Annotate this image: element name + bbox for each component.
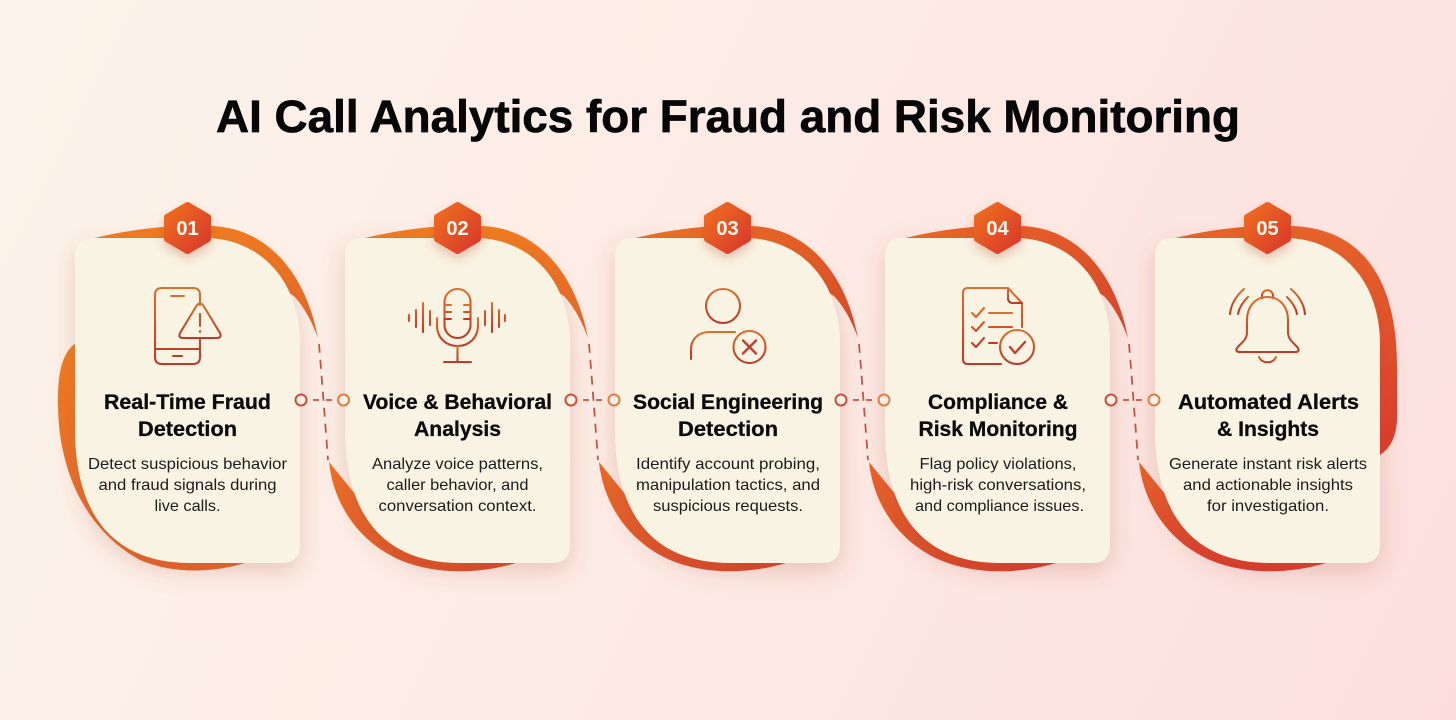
description 5: and actionable insights: [1183, 477, 1353, 494]
heading 5: & Insights: [1217, 417, 1319, 441]
icon: phone with warning: [155, 288, 221, 364]
heading 2: [363, 390, 552, 441]
description 1: [88, 456, 288, 515]
description 4: high-risk conversations,: [910, 477, 1086, 494]
number badge 03: 03: [716, 218, 739, 240]
description 2: Analyze voice patterns,: [372, 456, 543, 473]
description 3: Identify account probing,: [636, 456, 820, 473]
lower ribbon: step 5: [1139, 462, 1326, 571]
description 2: [372, 456, 543, 515]
left ribbon: step 1: [58, 343, 245, 570]
card panel 1: [75, 238, 300, 563]
heading 3: Detection: [678, 417, 778, 441]
connector 4 to 5: [1106, 344, 1160, 460]
description 3: suspicious requests.: [653, 498, 803, 515]
card panel 4: [885, 238, 1110, 563]
heading 5: [1178, 390, 1359, 441]
connector 1 to 2: [296, 344, 349, 460]
lower ribbon: step 3: [599, 462, 786, 571]
connector 3 to 4: [836, 344, 890, 460]
step 4 card: [869, 205, 1128, 571]
heading 4: Risk Monitoring: [918, 417, 1078, 441]
lower ribbon: step 2: [329, 462, 516, 571]
top ribbon: step 4: [905, 226, 1128, 338]
heading 3: Social Engineering: [633, 390, 823, 414]
number badge 05: 05: [1256, 218, 1279, 240]
description 2: caller behavior, and: [386, 477, 528, 494]
description 1: live calls.: [154, 498, 220, 515]
description 5: Generate instant risk alerts: [1169, 456, 1367, 473]
heading 1: [104, 390, 271, 441]
icon: microphone with sound waves: [409, 289, 505, 362]
description 1: Detect suspicious behavior: [88, 456, 288, 473]
title: AI Call Analytics for Fraud and Risk Monitoring: [216, 91, 1240, 142]
description 4: and compliance issues.: [915, 498, 1084, 515]
number badge 04: 04: [986, 218, 1009, 240]
description 3: manipulation tactics, and: [636, 477, 820, 494]
icon: checklist document: [963, 288, 1034, 364]
description 3: [636, 456, 820, 515]
number badge 05: [1247, 205, 1288, 251]
top ribbon: step 1: [95, 226, 318, 338]
step 1 card: [58, 205, 318, 570]
card panel 2: [345, 238, 570, 563]
heading 3: [633, 390, 823, 441]
top and right ribbon: step 5: [1175, 226, 1397, 455]
top ribbon: step 3: [635, 226, 858, 338]
number badge 02: 02: [446, 218, 469, 240]
description 4: [910, 456, 1086, 515]
card panel 3: [615, 238, 840, 563]
description 2: conversation context.: [378, 498, 536, 515]
icon: ringing bell: [1230, 289, 1305, 362]
description 5: [1169, 456, 1367, 515]
step 3 card: [599, 205, 858, 571]
icon: person with cross: [691, 289, 766, 363]
heading 4: Compliance &: [928, 390, 1068, 414]
heading 4: [918, 390, 1078, 441]
lower ribbon: step 4: [869, 462, 1056, 571]
card panel 5: [1155, 238, 1380, 563]
step 2 card: [329, 205, 588, 571]
step 5 card: [1139, 205, 1397, 571]
description 5: for investigation.: [1207, 498, 1329, 515]
top ribbon: step 2: [365, 226, 588, 338]
description 1: and fraud signals during: [98, 477, 276, 494]
connector 2 to 3: [566, 344, 620, 460]
description 4: Flag policy violations,: [920, 456, 1076, 473]
heading 2: Voice & Behavioral: [363, 390, 552, 414]
heading 1: Detection: [138, 417, 237, 441]
number badge 02: [437, 205, 478, 251]
number badge 01: [167, 205, 208, 251]
number badge 01: 01: [176, 218, 199, 240]
number badge 03: [707, 205, 748, 251]
heading 2: Analysis: [414, 417, 501, 441]
heading 1: Real-Time Fraud: [104, 390, 271, 414]
heading 5: Automated Alerts: [1178, 390, 1359, 414]
number badge 04: [977, 205, 1018, 251]
